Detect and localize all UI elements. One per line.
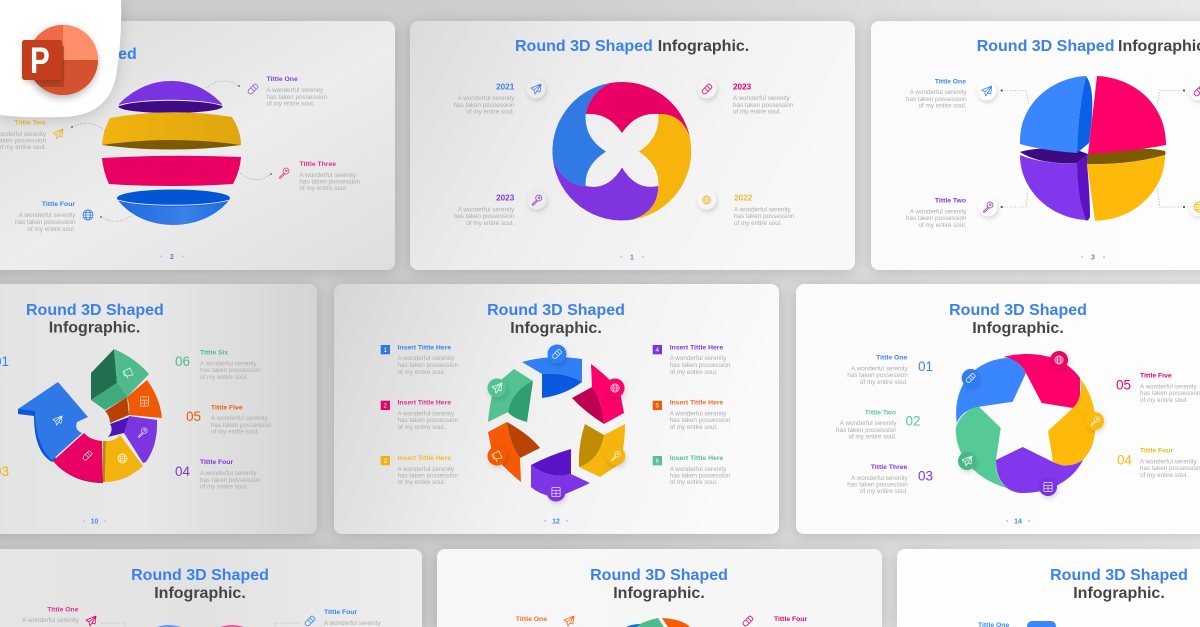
- list item 2: 2: [384, 403, 388, 410]
- page number 1: 1: [630, 254, 634, 262]
- label: title one: of my entire soul.: [860, 379, 908, 386]
- label: title three: of my entire soul.: [300, 185, 348, 192]
- list item 3: 3: [384, 458, 388, 465]
- list item 1: A wonderful serenity: [398, 355, 455, 362]
- slide 12 heading: Round 3D Shaped: [487, 302, 625, 319]
- label: title one: A wonderful serenity: [22, 617, 80, 624]
- label: 2022: [734, 194, 795, 227]
- list item 1: has taken possession: [398, 362, 459, 369]
- spiral arrow chart: [18, 349, 162, 483]
- label: title five: A wonderful serenity: [211, 415, 269, 422]
- icon badge: key: [978, 198, 998, 216]
- icon: pen: [305, 616, 315, 626]
- list item 2: Insert Tittle Here: [398, 400, 451, 407]
- label: title two: has taken possession: [836, 427, 897, 434]
- panel: slide 1, swirl circle: [410, 21, 855, 270]
- label: title one: 01: [918, 359, 933, 374]
- list item 3: has taken possession: [398, 472, 459, 480]
- segment: purple: [108, 417, 129, 437]
- label: title one: [906, 78, 967, 110]
- connectors: [71, 81, 272, 221]
- label: title one: has taken possession: [266, 94, 328, 101]
- label: title one: Tittle One: [47, 606, 79, 614]
- segment: pink: [53, 461, 103, 483]
- label: 2022: has taken possession: [734, 213, 795, 220]
- list item 4: of my entire soul.: [670, 369, 718, 376]
- hexagon ring chart: [488, 344, 625, 502]
- label: title one: [847, 355, 933, 386]
- label: title five: [186, 404, 272, 436]
- heading: [131, 567, 269, 602]
- label: title six: 06: [175, 354, 190, 369]
- slide 12 heading: Infographic.: [510, 320, 602, 337]
- heading: [1050, 567, 1188, 602]
- slide 1 heading: Round 3D Shaped: [515, 38, 653, 55]
- slide 10 heading: Round 3D Shaped: [26, 302, 164, 319]
- label: title six: A wonderful serenity: [200, 360, 258, 368]
- sphere slice: pink band: [102, 156, 241, 186]
- label: title one: [266, 76, 328, 108]
- segment: blue: [522, 357, 582, 382]
- segment: purple: [531, 465, 590, 497]
- list item 5: Insert Tittle Here: [670, 400, 723, 407]
- connectors: [1001, 89, 1185, 208]
- icon badge: paper plane: [977, 82, 996, 100]
- slide 1 heading: [515, 38, 749, 55]
- icon: paper plane: [86, 616, 96, 626]
- label: title four: [15, 201, 76, 233]
- label: title three: 03: [918, 468, 933, 484]
- label: title two: of my entire soul.: [849, 434, 897, 440]
- node: paper plane: [958, 452, 976, 470]
- label: 2021: [454, 82, 515, 116]
- label: title two: A wonderful serenity: [840, 420, 897, 427]
- label: 2022: of my entire soul.: [734, 220, 782, 227]
- segment: green: [91, 349, 117, 400]
- list item 1: of my entire soul.: [398, 369, 446, 376]
- slide 14 heading: Round 3D Shaped: [949, 302, 1087, 319]
- icon badge: paper plane: [526, 80, 546, 98]
- node: key: [1086, 412, 1104, 430]
- heading: [590, 567, 728, 602]
- label: title one: A wonderful serenity: [910, 89, 967, 96]
- segment: blue: [552, 83, 610, 186]
- label: title three: of my entire soul.: [860, 488, 908, 495]
- label: title four: [1117, 448, 1200, 479]
- page number 2: 2: [170, 254, 174, 261]
- heading: Infographic.: [154, 585, 246, 602]
- label: 2023 pink: has taken possession: [733, 102, 794, 109]
- icon: paper plane: [53, 129, 63, 139]
- label: 2022: A wonderful serenity: [734, 206, 792, 214]
- sphere slice: blue bowl: [117, 190, 230, 225]
- list item 5: has taken possession: [670, 417, 731, 424]
- segment: yellow: [103, 441, 106, 482]
- label: title four: A wonderful serenity: [19, 212, 76, 219]
- label: title two: has taken possession: [906, 215, 967, 222]
- blue block: [1027, 621, 1056, 627]
- white corner card: [0, 0, 121, 117]
- label: title four: has taken possession: [200, 477, 261, 484]
- label: title three: has taken possession: [300, 178, 361, 186]
- panel: slide 3, quartered sphere: [871, 21, 1200, 270]
- quarter: yellow: [1087, 155, 1165, 221]
- list item 6: A wonderful serenity: [670, 466, 727, 473]
- segment: purple: [996, 447, 1083, 493]
- list item 1: 1: [384, 347, 388, 354]
- chart tips: [157, 625, 244, 627]
- heading: Round 3D Shaped: [590, 567, 728, 584]
- label: title one: has taken possession: [906, 96, 967, 103]
- list item 5: [653, 400, 731, 431]
- icon badge: megaphone: [560, 616, 578, 627]
- label: title four: Tittle Four: [200, 459, 233, 466]
- label: title one: [22, 606, 80, 624]
- list item 5: A wonderful serenity: [670, 410, 727, 418]
- label: 2021: of my entire soul.: [466, 108, 515, 116]
- list item 2: has taken possession: [398, 417, 459, 424]
- icon badge: key: [527, 190, 546, 210]
- label: 2021: A wonderful serenity: [458, 95, 515, 102]
- list item 4: 4: [656, 347, 660, 354]
- label: title five: of my entire soul.: [211, 428, 259, 436]
- connector left: [101, 623, 125, 627]
- list item 1: Insert Tittle Here: [398, 344, 451, 352]
- heading: Infographic.: [613, 585, 705, 602]
- label: title three: A wonderful serenity: [300, 172, 357, 179]
- label: 2023 purple: A wonderful serenity: [458, 206, 515, 214]
- label: title five: has taken possession: [1140, 390, 1200, 397]
- label: 2021: has taken possession: [454, 102, 515, 109]
- label: title four: has taken possession: [15, 219, 76, 226]
- list item 6: Insert Tittle Here: [670, 455, 723, 462]
- label: title six: [175, 350, 261, 381]
- label: title two: Tittle Two: [865, 410, 896, 416]
- node: paper plane: [488, 378, 506, 398]
- list item 5: 5: [656, 403, 660, 410]
- page number 14: 14: [1014, 518, 1022, 526]
- icon badge: globe: [697, 190, 716, 210]
- heading: Round 3D Shaped: [131, 567, 269, 584]
- label: title two: of my entire soul.: [919, 222, 967, 229]
- label: title four: Tittle Four: [1140, 448, 1173, 454]
- node: news: [546, 482, 566, 502]
- segment: green: [956, 407, 1007, 488]
- list item 3: A wonderful serenity: [398, 466, 455, 473]
- star circle chart: [956, 351, 1104, 496]
- label: title six: has taken possession: [200, 367, 261, 374]
- icon badge: pen: [738, 616, 758, 627]
- label: title five: 05: [1116, 378, 1131, 392]
- segment: yellow: [633, 114, 691, 220]
- list item 6: [653, 455, 731, 486]
- segment: pink: [586, 82, 690, 138]
- label: title four: of my entire soul.: [1140, 472, 1188, 479]
- slide 10 heading: Infographic.: [49, 320, 140, 337]
- list item 3: Insert Tittle Here: [398, 455, 451, 462]
- list item 3: of my entire soul.: [398, 479, 446, 486]
- label: title six: of my entire soul.: [200, 374, 248, 381]
- label: title four: Tittle Four: [324, 609, 357, 616]
- quarter: purple: [1077, 154, 1090, 221]
- segment: orange: [488, 422, 521, 482]
- heading: Infographic.: [1073, 585, 1165, 602]
- segment: yellow: [1048, 378, 1095, 465]
- icon badge: pen: [1190, 82, 1200, 100]
- list item 4: has taken possession: [670, 362, 731, 369]
- list item 4: A wonderful serenity: [670, 355, 727, 362]
- label: title five: Tittle Five: [211, 404, 243, 412]
- label: title one: Tittle One: [266, 76, 298, 83]
- segment: orange: [105, 397, 129, 423]
- list item 2: A wonderful serenity: [398, 410, 455, 418]
- list item 4: [653, 344, 731, 376]
- label: title three: Tittle Three: [300, 161, 336, 168]
- segment: pink: [591, 364, 624, 424]
- label: title one: A wonderful serenity: [266, 87, 324, 94]
- label: title one: of my entire soul.: [266, 100, 315, 108]
- segment: yellow: [579, 424, 625, 477]
- label: 2023 pink: 2023: [733, 82, 752, 92]
- list item 1: [381, 344, 459, 376]
- panel: bottom slide right: [897, 549, 1200, 627]
- connector right: [275, 623, 299, 627]
- label: title two: [906, 198, 967, 229]
- heading: Round 3D Shaped: [1050, 567, 1188, 584]
- slide 14 heading: Infographic.: [972, 320, 1064, 337]
- label: title two: [836, 410, 921, 440]
- page number 10: 10: [91, 518, 98, 526]
- label: 2023 purple: has taken possession: [454, 213, 515, 220]
- quarter: blue: [1020, 76, 1086, 153]
- node: news: [1039, 478, 1057, 496]
- icon: globe: [83, 210, 93, 220]
- label: 2023 purple: of my entire soul.: [466, 220, 515, 227]
- label: title two: A wonderful serenity: [910, 208, 967, 216]
- slide 2 heading: Round 3D Shaped: [0, 46, 137, 63]
- page number 12: 12: [552, 518, 560, 526]
- panel: bottom slide centre: [437, 549, 882, 627]
- label: title five: [1116, 372, 1200, 404]
- label: title four: A wonderful serenity: [200, 470, 258, 477]
- label: title four: Tittle Four: [774, 616, 807, 623]
- label: 2023 pink: A wonderful serenity: [733, 95, 791, 102]
- label: title four: 04: [1117, 452, 1132, 468]
- list item 6: of my entire soul.: [670, 479, 718, 486]
- segment: green: [488, 369, 533, 422]
- label: 2023 pink: of my entire soul.: [733, 108, 781, 116]
- panel: slide 2, sliced sphere: [0, 21, 395, 270]
- icon: key: [280, 168, 289, 178]
- node: globe: [606, 378, 624, 398]
- panel: bottom slide left: [0, 549, 422, 627]
- label: title two: [0, 120, 47, 151]
- label: 2023 purple: [454, 194, 515, 227]
- label: title three: [847, 464, 933, 495]
- list item 6: has taken possession: [670, 472, 731, 480]
- slide 10 heading: [26, 302, 164, 337]
- label: title four: A wonderful serenity: [324, 620, 382, 627]
- label: title five: 05: [186, 409, 201, 424]
- icon badge: pen: [698, 80, 716, 98]
- slide 1 heading: Infographic.: [658, 38, 749, 55]
- segment: purple: [553, 160, 658, 220]
- label: title four: has taken possession: [1140, 465, 1200, 472]
- label: title one: of my entire soul.: [919, 102, 967, 110]
- panel: slide 10, spiral arrow: [0, 284, 317, 534]
- label: title four: of my entire soul.: [200, 484, 248, 490]
- label: title three: has taken possession: [847, 482, 908, 488]
- list item 3: [381, 455, 459, 486]
- segment: pink: [1003, 354, 1080, 408]
- label: title two: 02: [906, 414, 921, 428]
- list item 2: of my entire soul.: [398, 424, 446, 431]
- label: title four: of my entire soul.: [28, 226, 76, 233]
- panel: slide 14, star circle: [796, 284, 1200, 534]
- segment: blue: [956, 358, 1026, 423]
- swirl chart: [552, 82, 691, 220]
- node: pen: [548, 344, 566, 364]
- label: title one: A wonderful serenity: [851, 366, 909, 372]
- label: 2021: 2021: [496, 82, 515, 92]
- slide 14 heading: [949, 302, 1087, 337]
- sphere slice: purple cap: [118, 81, 222, 113]
- list item 4: Insert Tittle Here: [670, 344, 723, 352]
- label: title four: Tittle Four: [42, 201, 75, 208]
- slide 3 heading: [977, 38, 1200, 55]
- page number 3: 3: [1091, 254, 1095, 262]
- label: title five: has taken possession: [211, 422, 272, 429]
- label: title six: Tittle Six: [200, 350, 228, 356]
- node: megaphone: [488, 446, 506, 466]
- label: 2023 pink: [733, 82, 794, 116]
- sphere slice: yellow band: [102, 112, 241, 150]
- node: pen: [962, 369, 980, 387]
- label: title two: Tittle Two: [14, 120, 46, 126]
- slide 12 heading: [487, 302, 625, 337]
- label: title one: has taken possession: [847, 372, 908, 379]
- label: title four: 04: [175, 464, 191, 479]
- panel: slide 12, hexagon ring: [334, 284, 779, 534]
- node: key: [606, 446, 625, 466]
- page dots: [83, 255, 1105, 522]
- label: title three: A wonderful serenity: [851, 475, 909, 482]
- label: title one: Tittle One: [516, 616, 547, 623]
- label: title one: Tittle One: [876, 355, 908, 362]
- quartered sphere chart: [1020, 76, 1166, 221]
- list item 5: of my entire soul.: [670, 424, 718, 431]
- PowerPoint badge: [0, 0, 121, 117]
- PowerPoint logo: P: [30, 41, 50, 82]
- label: title four: [175, 459, 261, 490]
- segment: blue arrow: [18, 409, 56, 462]
- quarter: pink: [1088, 76, 1166, 154]
- pie chart top: [626, 618, 690, 627]
- label: title five: Tittle Five: [1140, 372, 1172, 380]
- slide 3 heading: Round 3D Shaped: [977, 38, 1114, 55]
- label: title five: A wonderful serenity: [1140, 384, 1198, 390]
- list item 6: 6: [656, 458, 660, 465]
- label: title three: Tittle Three: [871, 464, 908, 471]
- node: globe: [1050, 351, 1068, 369]
- chart icons: [53, 368, 149, 463]
- label: title three: [300, 161, 361, 192]
- label: title four: A wonderful serenity: [1140, 458, 1198, 466]
- label: title four: [324, 609, 382, 627]
- label: 2023 purple: 2023: [496, 194, 515, 203]
- icon: pen: [248, 84, 258, 94]
- label: title five: of my entire soul.: [1140, 397, 1188, 404]
- list item 2: [381, 400, 459, 431]
- icon badge: globe: [1190, 198, 1200, 216]
- label: 2022: 2022: [734, 194, 753, 203]
- label: title one: Tittle One: [935, 78, 966, 86]
- label: title two: Tittle Two: [935, 198, 966, 204]
